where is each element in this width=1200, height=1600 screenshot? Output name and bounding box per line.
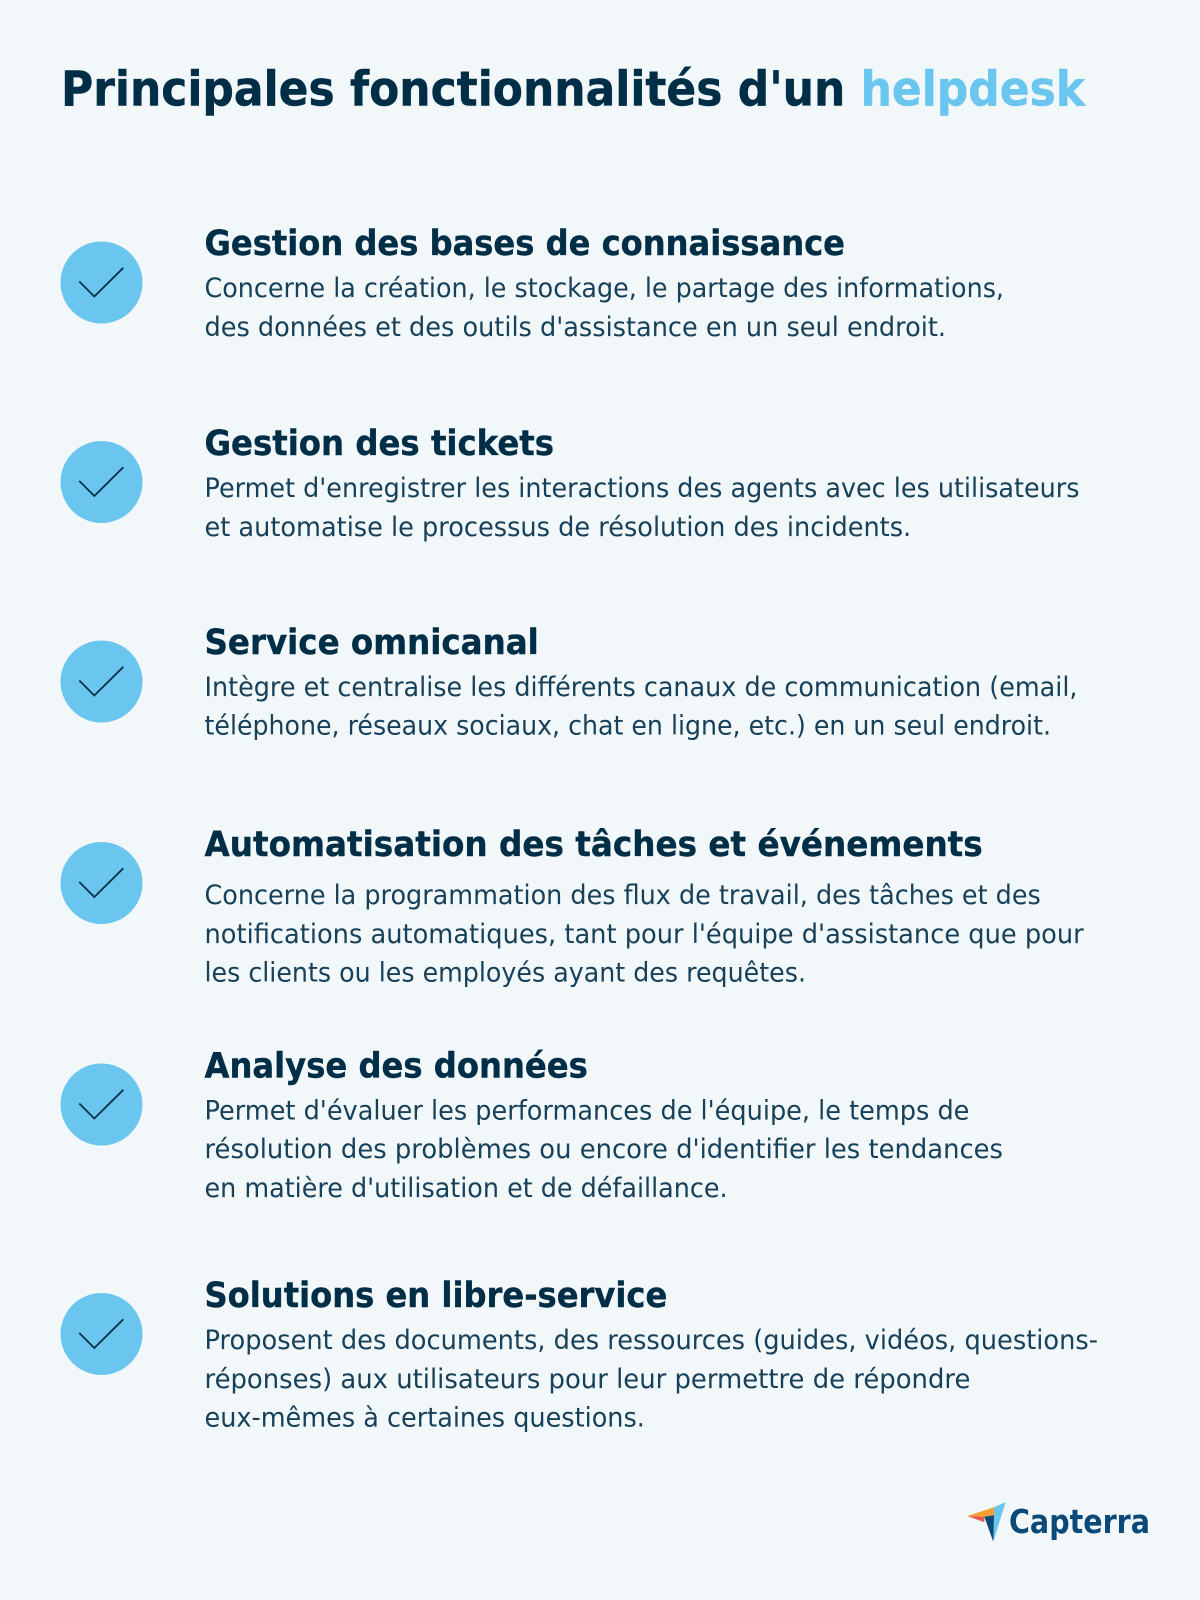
feature: data analysis <box>60 1046 1003 1204</box>
feature: knowledge base <box>60 224 1004 343</box>
description: Concerne la création, le stockage, le partage des informations, <box>204 273 1004 304</box>
description: Proposent des documents, des ressources (guides, vidéos, questions- <box>204 1325 1098 1356</box>
title: Principales fonctionnalités d'un helpdesk <box>61 62 1086 118</box>
description: en matière d'utilisation et de défaillance. <box>204 1173 728 1204</box>
icon: check <box>60 441 142 523</box>
feature: omnichannel <box>60 623 1078 742</box>
heading: Automatisation des tâches et événements <box>204 825 983 865</box>
feature: tickets <box>60 424 1080 543</box>
icon: Capterra arrow <box>967 1502 1006 1542</box>
description <box>204 273 1004 343</box>
description: Concerne la programmation des flux de travail, des tâches et des <box>204 880 1041 911</box>
description: notifications automatiques, tant pour l'équipe d'assistance que pour <box>204 919 1085 950</box>
icon: check <box>60 1064 142 1146</box>
icon: check <box>60 842 142 924</box>
description: les clients ou les employés ayant des requêtes. <box>204 958 806 989</box>
heading: Analyse des données <box>204 1046 588 1086</box>
description <box>204 672 1078 742</box>
wordmark: Capterra <box>1009 1502 1150 1541</box>
description <box>204 1325 1098 1434</box>
icon: check <box>60 640 142 722</box>
description: résolution des problèmes ou encore d'identifier les tendances <box>204 1134 1003 1165</box>
heading: Gestion des tickets <box>204 424 554 464</box>
icon: check <box>60 1293 142 1375</box>
description: des données et des outils d'assistance en un seul endroit. <box>204 312 946 343</box>
description: Permet d'enregistrer les interactions des agents avec les utilisateurs <box>204 473 1080 504</box>
description: Intègre et centralise les différents canaux de communication (email, <box>204 672 1078 703</box>
description: et automatise le processus de résolution des incidents. <box>204 512 911 543</box>
description: réponses) aux utilisateurs pour leur permettre de répondre <box>204 1364 970 1395</box>
feature: automation <box>60 825 1085 989</box>
description <box>204 473 1080 543</box>
description: téléphone, réseaux sociaux, chat en ligne, etc.) en un seul endroit. <box>204 711 1051 742</box>
heading: Solutions en libre-service <box>204 1276 667 1316</box>
heading: Service omnicanal <box>204 623 539 663</box>
logo: Capterra <box>967 1502 1150 1542</box>
feature: self-service <box>60 1276 1098 1434</box>
description: Permet d'évaluer les performances de l'équipe, le temps de <box>204 1095 969 1126</box>
icon: check <box>60 242 142 324</box>
description <box>204 1095 1003 1204</box>
description: eux-mêmes à certaines questions. <box>204 1403 645 1434</box>
description <box>204 880 1085 989</box>
heading: Gestion des bases de connaissance <box>204 224 845 264</box>
